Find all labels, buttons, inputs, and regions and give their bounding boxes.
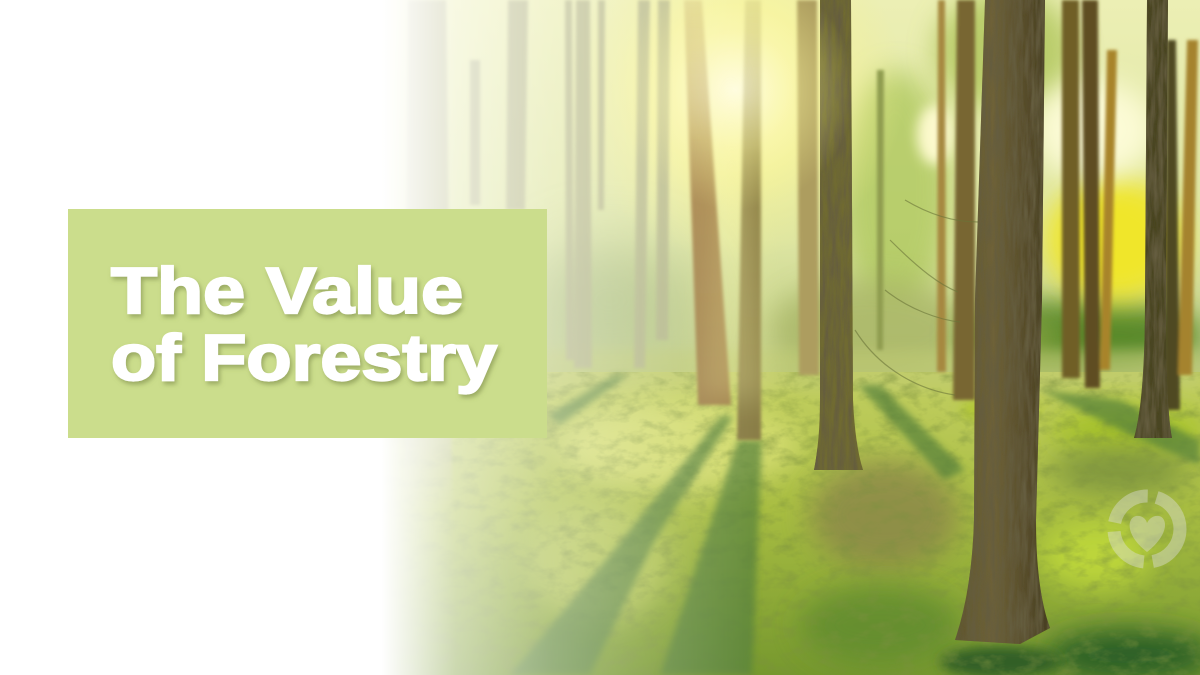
title text <box>111 254 497 394</box>
tree shadows on the ground <box>510 375 1200 675</box>
mossy forest floor <box>0 350 1200 675</box>
watermark logo: ring and heart <box>1114 496 1180 562</box>
large pine trunk, foreground <box>955 0 1050 644</box>
thin branches <box>855 200 978 395</box>
distant pale trunks <box>404 0 670 510</box>
title text: of Forestry <box>111 321 497 394</box>
title text: The Value <box>111 254 463 327</box>
large pine trunk, centre <box>814 0 863 470</box>
title banner <box>68 209 547 438</box>
mid-distance trunks <box>684 0 1198 440</box>
sunlight haze <box>615 0 855 400</box>
sky and distant foliage <box>0 0 1200 400</box>
large pine trunk, right <box>1134 0 1172 438</box>
